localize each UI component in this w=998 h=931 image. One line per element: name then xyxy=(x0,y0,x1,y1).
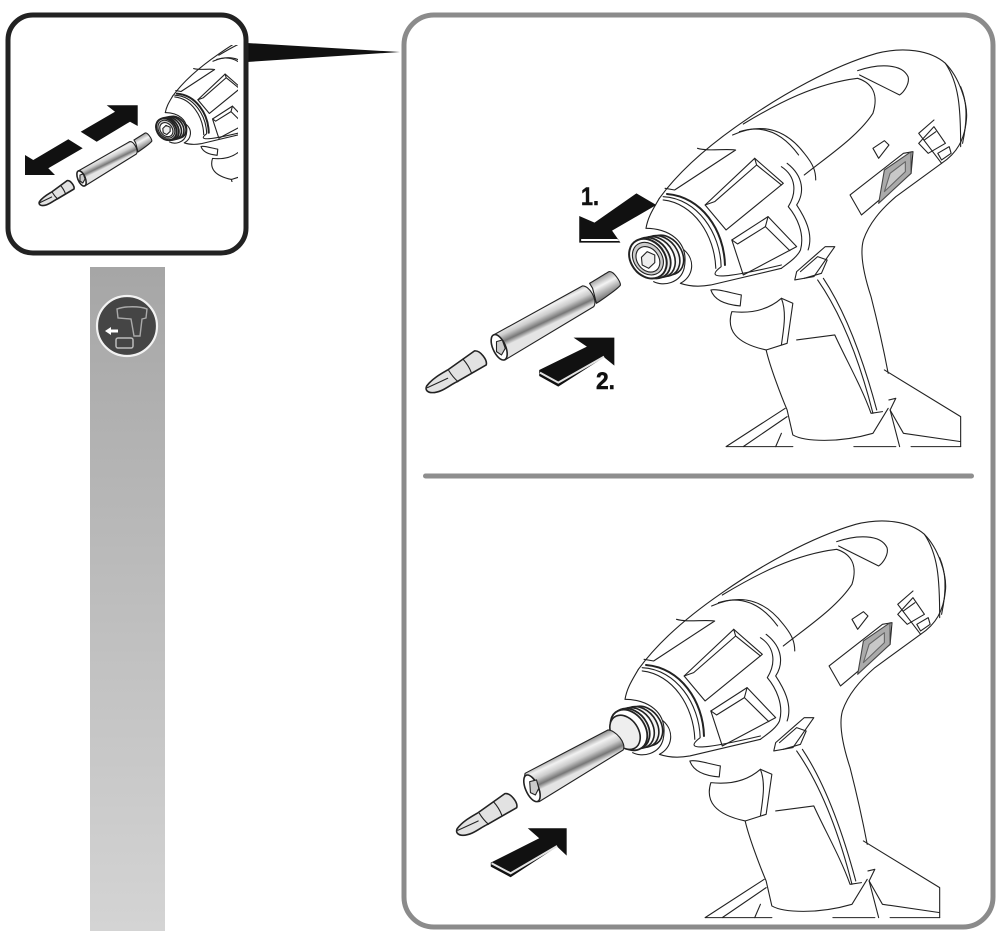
left sidebar xyxy=(90,267,165,931)
inset bit xyxy=(39,181,74,206)
arrow xyxy=(491,828,567,877)
drill xyxy=(622,50,967,447)
bit holder xyxy=(488,272,620,362)
step two illustration xyxy=(457,521,946,918)
bit xyxy=(426,351,486,393)
collet with holder xyxy=(520,699,670,803)
inset arrow: insert xyxy=(81,105,138,142)
inset: detail view xyxy=(8,14,400,253)
icon: drill battery removal xyxy=(97,296,157,356)
inset frame xyxy=(8,15,246,253)
drill xyxy=(625,521,946,918)
callout wedge xyxy=(247,43,400,62)
bit xyxy=(457,794,517,835)
arrow 1 xyxy=(579,193,656,243)
inset bit holder xyxy=(75,133,152,187)
panel: instructions frame xyxy=(404,15,993,927)
label 1: 1. xyxy=(581,183,599,211)
divider xyxy=(423,474,974,478)
inset drill xyxy=(155,45,238,182)
inset arrow: remove xyxy=(25,139,83,175)
arrow 2 xyxy=(539,338,614,387)
label 2: 2. xyxy=(596,368,615,395)
step one illustration xyxy=(426,50,967,447)
